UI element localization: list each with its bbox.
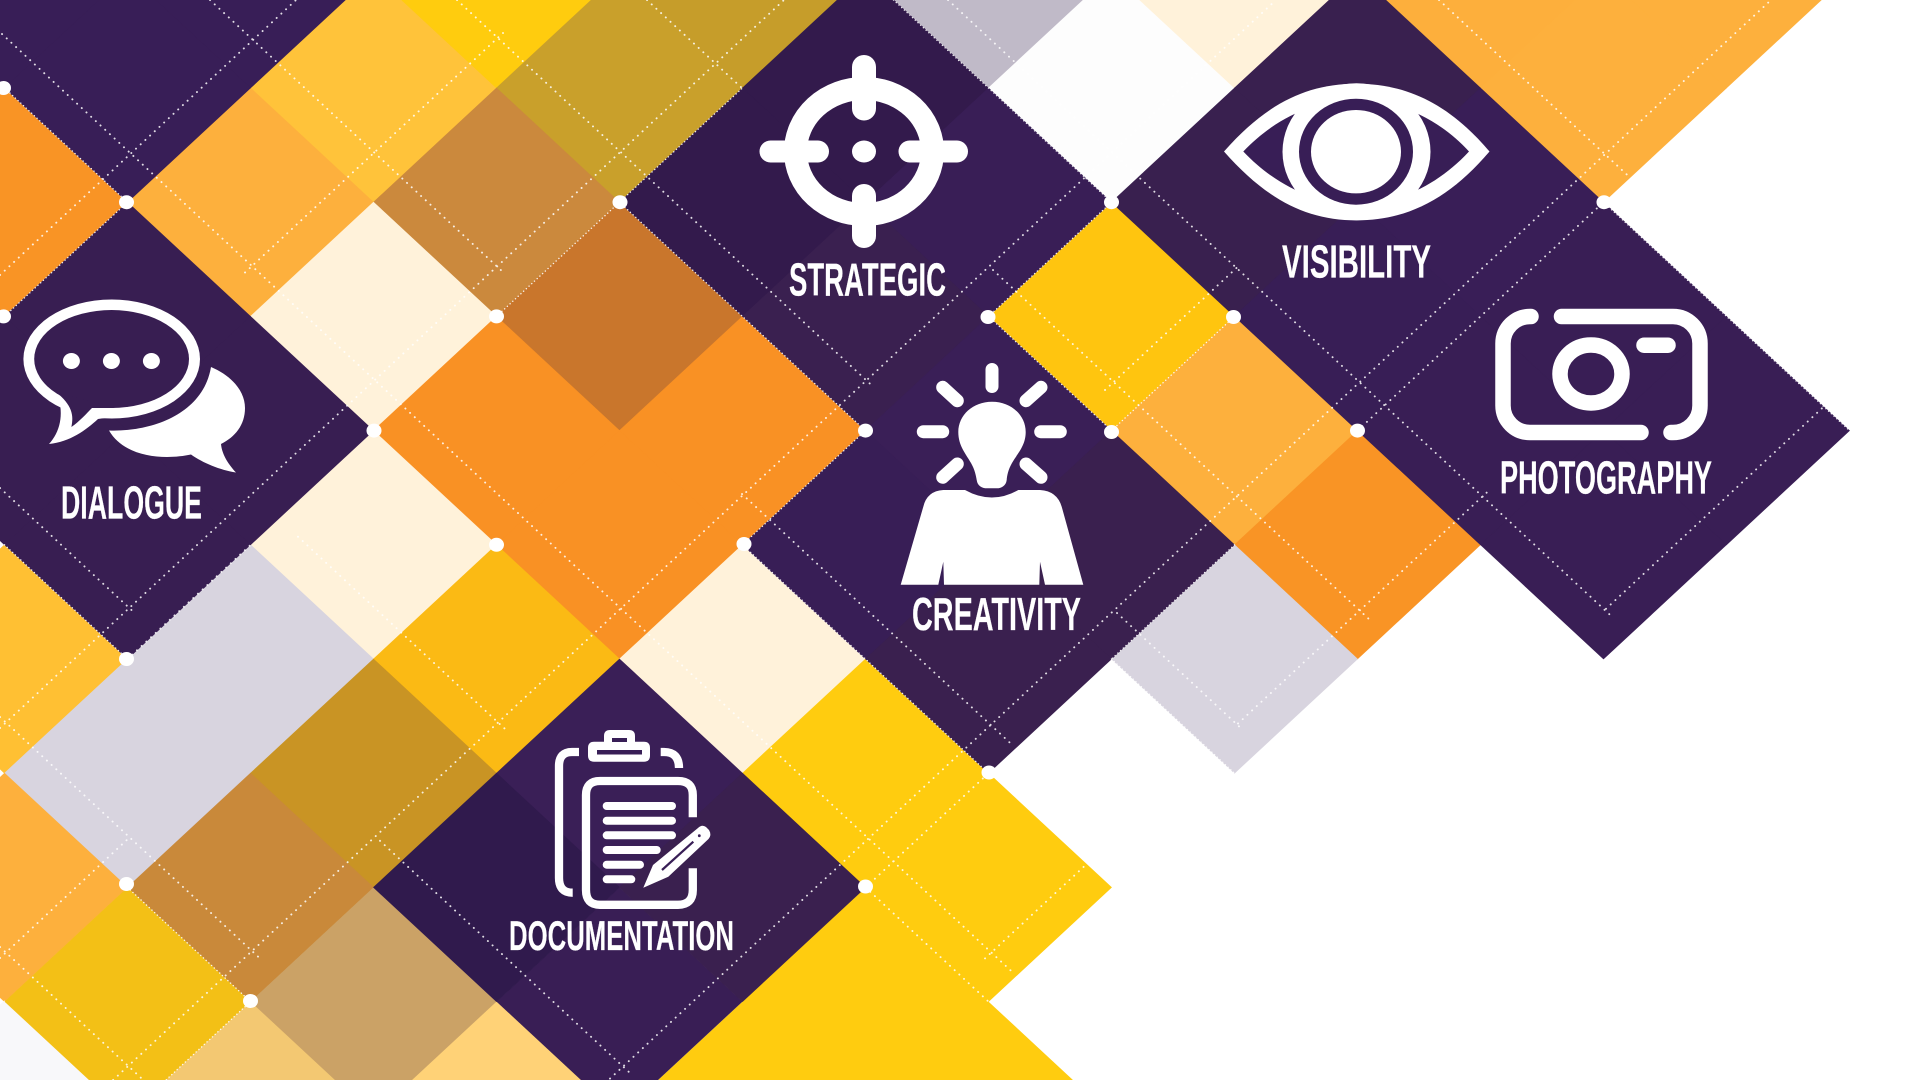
icon: clipboard with pencil bbox=[559, 730, 710, 905]
label: dialogue: DIALOGUE bbox=[61, 476, 202, 528]
panel: photography bbox=[1358, 202, 1850, 659]
panel: strategic bbox=[620, 0, 1112, 431]
label: creativity: CREATIVITY bbox=[912, 588, 1081, 640]
white junction nodes bbox=[0, 81, 1612, 1008]
panel: visibility bbox=[1112, 0, 1604, 431]
icon: speech bubbles bbox=[23, 300, 245, 472]
panel: top-left purple diamond bbox=[0, 0, 374, 202]
label: visibility: VISIBILITY bbox=[1282, 236, 1431, 288]
icon: crosshair target bbox=[760, 55, 968, 248]
panel: documentation bbox=[374, 659, 866, 1080]
label: strategic: STRATEGIC bbox=[789, 254, 946, 306]
panel: dialogue bbox=[0, 202, 374, 659]
label: photography: PHOTOGRAPHY bbox=[1500, 452, 1712, 504]
icon: eye bbox=[1224, 83, 1490, 220]
panel: creativity bbox=[742, 316, 1234, 773]
icon: person with light bulb bbox=[901, 370, 1083, 585]
label: documentation: DOCUMENTATION bbox=[509, 912, 734, 959]
icon: camera bbox=[1503, 316, 1700, 432]
